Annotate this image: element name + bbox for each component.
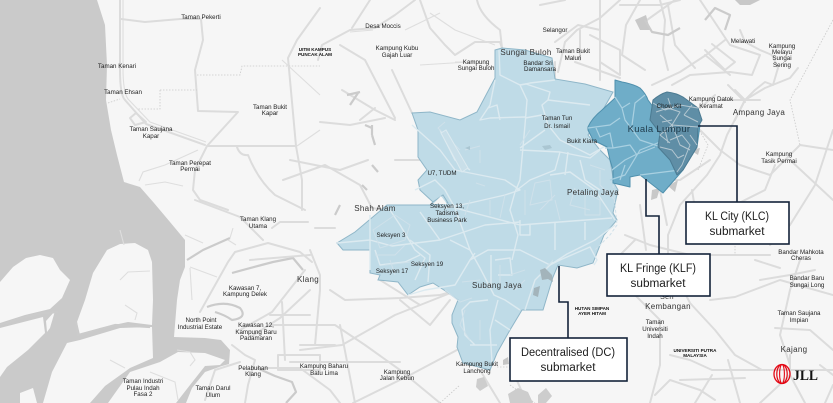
place labels: Fasa 2 xyxy=(134,391,153,398)
place labels: Melawati xyxy=(731,38,755,45)
place labels: Kampung xyxy=(384,369,411,376)
place labels: Taman Klang xyxy=(240,216,277,223)
JLL logo xyxy=(774,364,818,384)
place labels: Kampung xyxy=(463,59,490,66)
callout: Decentralised submarket: submarket xyxy=(540,362,596,374)
land roads, east xyxy=(540,0,833,403)
place labels: Taman Perepat xyxy=(169,160,211,167)
place labels: Kampung Bukit xyxy=(456,361,498,368)
place labels: Kampung Delek xyxy=(223,291,268,298)
place labels: Taman Kenari xyxy=(98,63,136,70)
callout: Decentralised submarket: Decentralised (DC) xyxy=(521,347,615,359)
place labels: Taman Ehsan xyxy=(104,89,142,96)
place labels: Bandar Sri xyxy=(523,60,553,67)
place labels: Kampung Datok xyxy=(689,96,734,103)
place labels: Kampung Kubu xyxy=(376,45,419,52)
place labels: Dr. Ismail xyxy=(544,123,570,130)
place labels: Ulum xyxy=(206,392,220,399)
place labels: Sering xyxy=(773,62,791,69)
place labels: Gajah Luar xyxy=(382,52,412,59)
institution labels xyxy=(298,47,717,358)
callout: KL Fringe submarket: submarket xyxy=(630,278,686,290)
place labels: Taman Tun xyxy=(542,115,573,122)
place labels: Impian xyxy=(790,317,809,324)
institution labels: HUTAN SIMPAN xyxy=(575,306,610,311)
place labels: Melayu xyxy=(772,49,793,56)
land roads and rivers, west xyxy=(108,0,400,403)
institution labels: MALAYSIA xyxy=(683,353,707,358)
callout: Decentralised submarket xyxy=(510,338,627,381)
callout: KL City submarket: KL City (KLC) xyxy=(705,211,769,223)
major town labels: Ampang Jaya xyxy=(733,108,785,117)
place labels: Kampung Baru xyxy=(235,329,277,336)
place labels: Sungai Buloh xyxy=(458,65,495,72)
place labels: Taman Bukit xyxy=(253,104,287,111)
place labels: Seksyen 17 xyxy=(376,268,409,275)
major town labels: Kuala Lumpur xyxy=(628,124,690,135)
place labels: Taman Darul xyxy=(195,385,231,392)
place labels: Bandar Baru xyxy=(790,275,825,282)
place labels: U7, TUDM xyxy=(427,170,457,177)
place labels: Keramat xyxy=(699,103,723,110)
place labels: Kampung xyxy=(769,43,796,50)
place labels: Kampung Baharu xyxy=(300,363,349,370)
major town labels xyxy=(297,48,807,354)
callout: KL Fringe submarket: KL Fringe (KLF) xyxy=(620,263,696,275)
place labels: Chow Kit xyxy=(657,103,682,110)
major town labels: Shah Alam xyxy=(354,204,396,213)
place labels: Bandar Mahkota xyxy=(778,249,824,256)
place labels: Taman xyxy=(646,319,665,326)
place labels: Jalan Kebun xyxy=(380,375,415,382)
callout leader lines xyxy=(559,126,737,339)
place labels: Seksyen 19 xyxy=(411,261,444,268)
callout: KL City submarket xyxy=(686,202,789,244)
place labels: Batu Lima xyxy=(310,370,338,377)
place labels: Taman Saujana xyxy=(778,310,821,317)
institution labels: UITM KAMPUS xyxy=(299,47,331,52)
place labels: Damansara xyxy=(524,66,557,73)
JLL logo: JLL xyxy=(793,368,818,384)
institution labels: PUNCAK ALAM xyxy=(298,52,332,57)
place labels: Lanchong xyxy=(463,368,491,375)
place labels: Sungai xyxy=(772,55,792,62)
place labels: Business Park xyxy=(427,217,468,224)
major town labels: Subang Jaya xyxy=(472,281,522,290)
submarket: KL City (KLC) area xyxy=(650,92,702,175)
sea and estuary xyxy=(0,0,296,403)
place labels: Selangor xyxy=(543,27,567,34)
place labels: Desa Moccis xyxy=(365,23,401,30)
place labels: Cheras xyxy=(791,255,811,262)
callout: KL Fringe submarket xyxy=(607,254,710,296)
submarket: KL Fringe (KLF) area xyxy=(588,80,700,193)
place labels: Sungai Long xyxy=(790,282,825,289)
place labels: Tadisma xyxy=(435,210,459,217)
place labels: Kampung xyxy=(766,151,793,158)
place labels: Kapar xyxy=(143,133,159,140)
place labels: Universiti xyxy=(642,326,668,333)
major town labels: Kembangan xyxy=(645,302,691,311)
place labels: Taman Pekerti xyxy=(181,14,221,21)
place labels: Pulau Indah xyxy=(126,385,160,392)
place labels: Tasik Permai xyxy=(761,158,797,165)
place labels: Seksyen 13, xyxy=(430,203,464,210)
place labels: Taman Saujana xyxy=(130,126,173,133)
institution labels: UNIVERSITI PUTRA xyxy=(674,348,717,353)
major town labels: Sungai Buloh xyxy=(500,48,552,57)
place labels: Industrial Estate xyxy=(178,324,223,331)
place labels: Padamaran xyxy=(240,335,273,342)
institution labels: AYER HITAM xyxy=(578,311,606,316)
major town labels: Klang xyxy=(297,275,319,284)
place labels: Bukit Kiara xyxy=(567,138,598,145)
place labels: Taman Bukit xyxy=(556,48,590,55)
place labels: Kapar xyxy=(262,110,278,117)
place labels: North Point xyxy=(186,317,217,324)
place labels: Taman Industri xyxy=(123,378,163,385)
place labels: Pelabuhan xyxy=(238,365,268,372)
place labels: Maluri xyxy=(565,55,581,62)
major town labels: Petaling Jaya xyxy=(567,188,619,197)
place labels: Klang xyxy=(245,371,261,378)
callout: KL City submarket: submarket xyxy=(710,226,765,238)
place labels: Seksyen 3 xyxy=(377,232,406,239)
land roads, north and south xyxy=(250,0,552,403)
major town labels: Kajang xyxy=(781,345,807,354)
place labels: Indah xyxy=(647,333,663,340)
place labels: Kawasan 7, xyxy=(229,285,261,292)
place labels: Permai xyxy=(180,166,200,173)
place labels: Utama xyxy=(249,223,268,230)
major town labels: Seri xyxy=(660,294,674,301)
place labels: Kawasan 12, xyxy=(238,322,274,329)
submarket: Decentralised (DC) area xyxy=(337,48,618,370)
